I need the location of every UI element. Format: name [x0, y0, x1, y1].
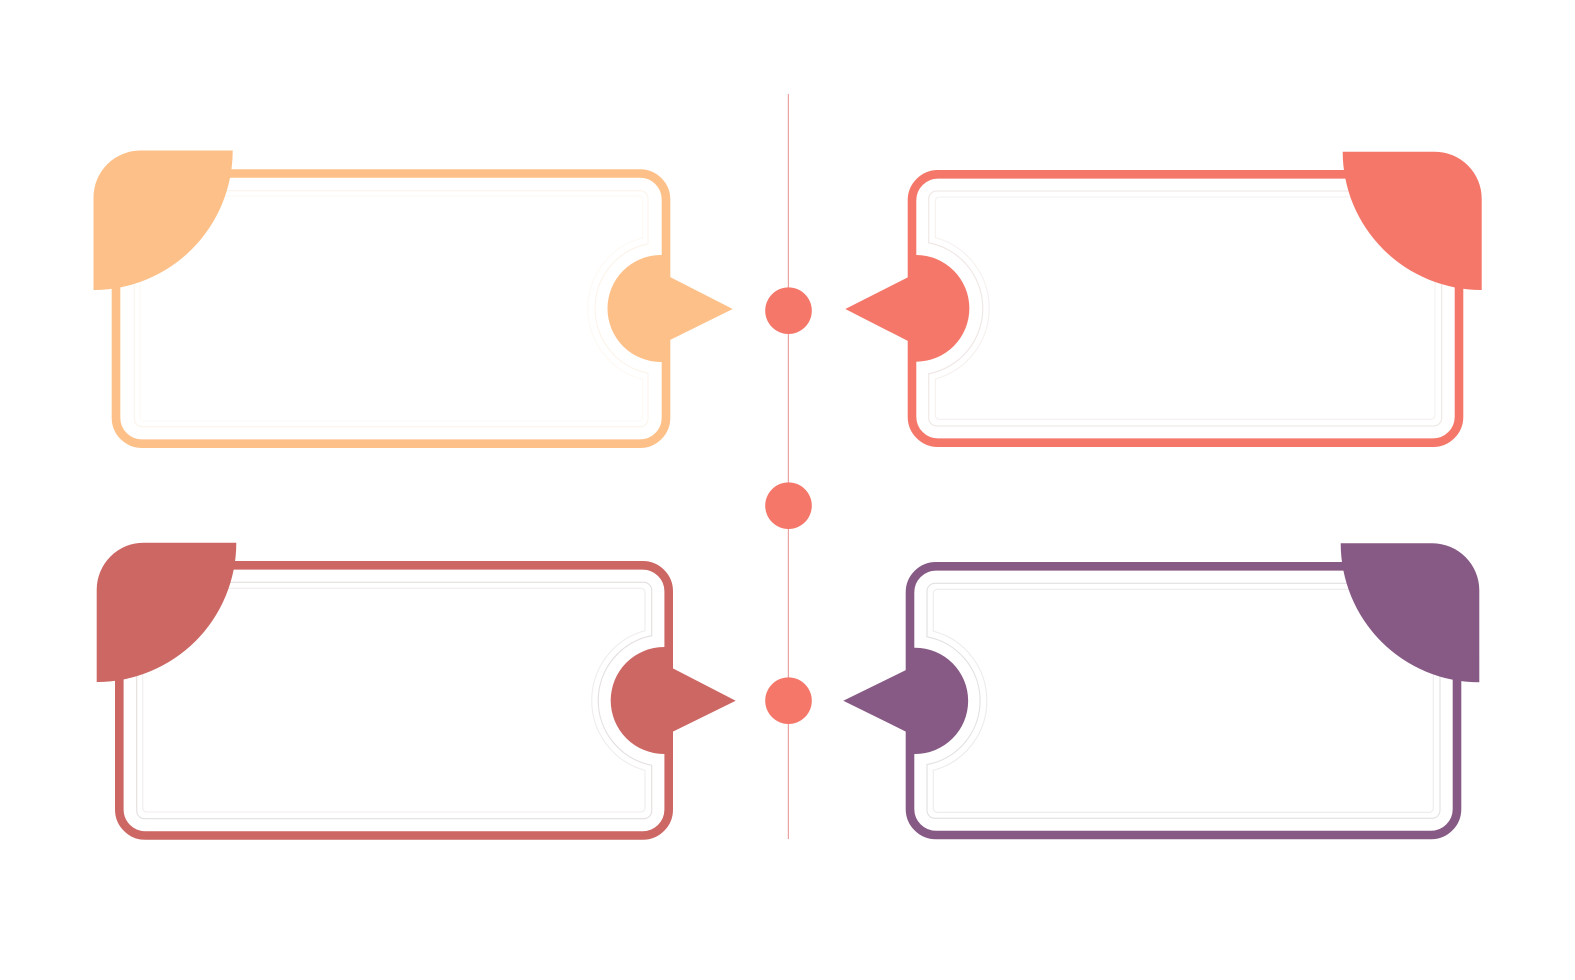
panel frame	[910, 566, 1457, 835]
inner outline	[134, 191, 648, 427]
corner leaf badge	[1341, 543, 1479, 682]
central timeline	[765, 94, 812, 839]
timeline dot: middle	[765, 482, 812, 529]
inner content outline	[140, 196, 643, 421]
inner content outline	[933, 589, 1433, 812]
panel: bottom right (purple)	[843, 543, 1479, 835]
inner outline	[927, 583, 1440, 818]
pointer: semicircle and arrow	[843, 648, 968, 754]
panel frame	[912, 174, 1459, 443]
panel: bottom left (red)	[97, 543, 736, 836]
pointer: semicircle and arrow	[845, 255, 969, 362]
pointer: semicircle and arrow	[611, 647, 736, 754]
inner outline	[929, 191, 1442, 426]
corner leaf badge	[97, 543, 236, 682]
inner content outline	[935, 197, 1435, 419]
panel: top left (peach)	[93, 150, 733, 444]
corner leaf badge	[1343, 152, 1482, 290]
timeline vertical line	[787, 94, 789, 839]
panel frame	[116, 174, 666, 444]
inner content outline	[143, 588, 645, 812]
panel: top right (coral)	[845, 152, 1482, 443]
panel frame	[119, 565, 669, 836]
timeline dot: top	[765, 287, 812, 334]
inner outline	[137, 582, 652, 819]
timeline dot: bottom	[765, 677, 812, 724]
corner leaf badge	[93, 150, 233, 290]
pointer: semicircle and arrow	[608, 255, 733, 362]
